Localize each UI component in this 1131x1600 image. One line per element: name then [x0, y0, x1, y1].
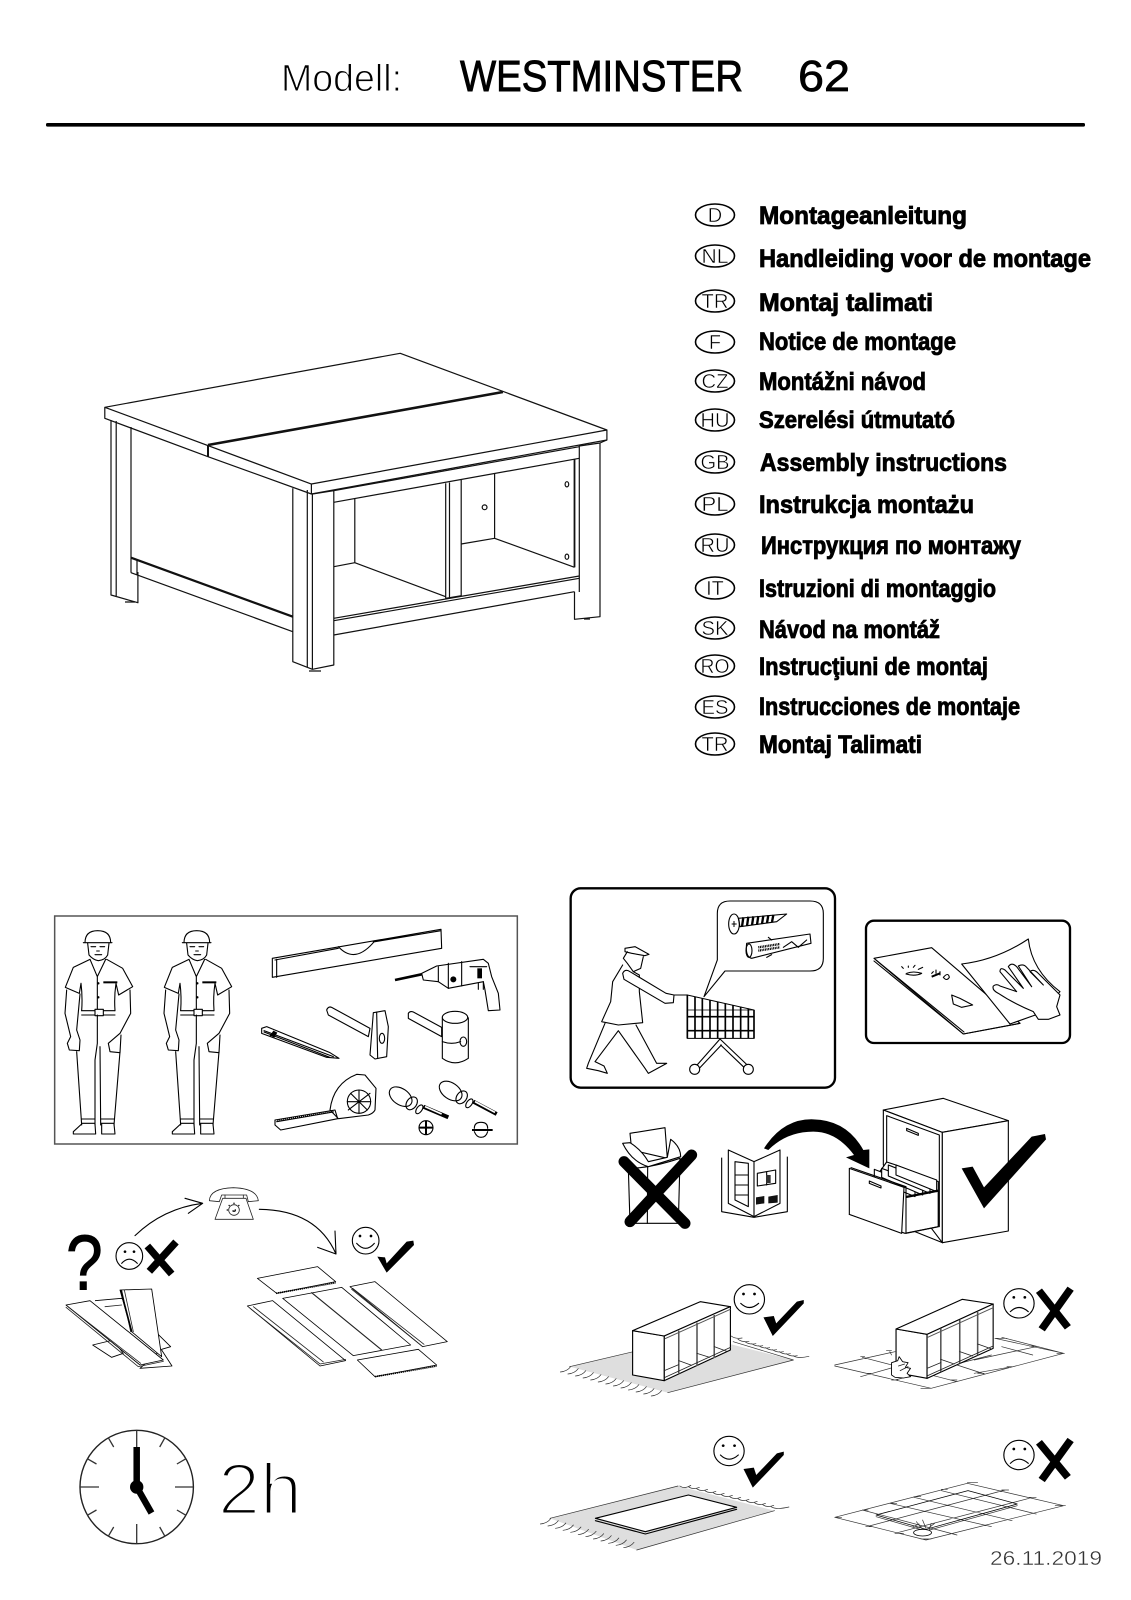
group: surface do and don't — [540, 1285, 1071, 1550]
icon: sad face — [1004, 1440, 1034, 1470]
TR 2: Montaj Talimati — [759, 731, 922, 759]
language list: assembly instructions titles — [696, 202, 1091, 759]
NL: Handleiding voor de montage — [759, 245, 1091, 273]
icon: happy face — [714, 1436, 744, 1466]
panel: wipe the surface — [866, 921, 1070, 1043]
title rule — [46, 123, 1085, 127]
IT: IT — [706, 578, 724, 600]
RO: RO — [700, 656, 730, 678]
icon: worker 2 — [164, 931, 232, 1134]
D: Montageanleitung — [759, 202, 967, 230]
icon: worker 1 — [65, 931, 133, 1134]
icon: bin crossed out — [623, 1128, 692, 1223]
scene: panel on rug — [540, 1436, 789, 1550]
title: Modell: — [281, 58, 402, 100]
TR: Montaj talimati — [759, 289, 933, 317]
icon: telephone — [209, 1188, 258, 1219]
IT: Istruzioni di montaggio — [759, 575, 996, 603]
icon: check — [743, 1452, 784, 1488]
scene: panel on tiles — [835, 1440, 1071, 1540]
HU: Szerelési útmutató — [759, 407, 955, 434]
RO: Instrucţiuni de montaj — [759, 653, 988, 681]
duration label: 2h — [218, 1450, 302, 1530]
title: 62 — [798, 52, 850, 101]
arrow: to solved — [259, 1209, 336, 1254]
SK — [696, 616, 940, 644]
HU: HU — [700, 410, 730, 432]
RU: Инструкция по монтажу — [761, 532, 1021, 560]
scene: cabinet on tiles — [835, 1289, 1071, 1388]
PL: PL — [702, 494, 728, 516]
D: D — [708, 205, 722, 227]
panel: shopping for fixings — [571, 888, 835, 1088]
NL: NL — [702, 246, 728, 268]
GB: Assembly instructions — [760, 449, 1007, 477]
icon: cross — [147, 1242, 176, 1274]
icon: wall plug — [746, 934, 811, 958]
CZ — [696, 368, 926, 396]
speech bubble — [704, 901, 823, 997]
title — [281, 52, 850, 101]
icon: cart — [687, 995, 754, 1074]
ES: ES — [702, 697, 728, 719]
icon: happy face — [352, 1227, 379, 1254]
CZ: CZ — [702, 371, 728, 393]
icon: tape measure — [275, 1074, 376, 1130]
SK: SK — [702, 618, 729, 640]
icon: screwdriver flat — [436, 1077, 497, 1137]
icon: sad face — [116, 1243, 143, 1269]
icon: cross — [1039, 1440, 1071, 1480]
icon: filing cabinet — [849, 1098, 1046, 1243]
F: F — [709, 332, 721, 354]
icon: question mark: ? — [66, 1218, 103, 1306]
icon: cross — [1039, 1289, 1071, 1329]
title: WESTMINSTER — [460, 52, 743, 101]
icon: mallet — [408, 1011, 468, 1063]
icon: hammer — [327, 1007, 388, 1059]
group: right column illustrations — [571, 888, 1070, 1223]
ES: Instrucciones de montaje — [759, 693, 1020, 721]
CZ: Montážni návod — [759, 368, 926, 396]
icon: screw — [729, 914, 787, 934]
scene: cabinet on rug — [560, 1285, 809, 1396]
icon: happy face — [734, 1285, 765, 1314]
icon: drill — [395, 959, 500, 1011]
icon: clock — [80, 1430, 193, 1544]
date: 26.11.2019 — [990, 1547, 1102, 1570]
icon: spirit level — [272, 929, 442, 977]
SK: Návod na montáž — [759, 616, 940, 644]
drawing: messy panels — [66, 1289, 172, 1368]
panel: two workers and tools — [55, 916, 517, 1144]
F — [696, 328, 956, 356]
icon: screwdriver cross — [386, 1083, 448, 1135]
icon: check — [377, 1241, 414, 1273]
check mark — [962, 1134, 1046, 1208]
F: Notice de montage — [759, 328, 956, 356]
TR 2 — [696, 731, 922, 759]
icon: pencil — [262, 1027, 339, 1058]
product drawing: coffee table — [105, 353, 607, 671]
RU: RU — [700, 535, 730, 557]
group: call for missing parts — [66, 1188, 447, 1377]
figure: man pushing cart — [587, 947, 687, 1073]
drawing: sorted panels — [247, 1267, 447, 1377]
icon: sad face — [1004, 1289, 1034, 1318]
arrow: booklet to filing drawer — [764, 1119, 869, 1168]
GB: GB — [700, 452, 730, 474]
icon: instruction booklet — [722, 1150, 787, 1217]
arrow: to telephone — [135, 1198, 203, 1236]
TR: TR — [702, 291, 728, 313]
icon: check — [763, 1300, 804, 1336]
TR 2: TR — [702, 734, 728, 756]
PL: Instrukcja montażu — [759, 491, 974, 519]
